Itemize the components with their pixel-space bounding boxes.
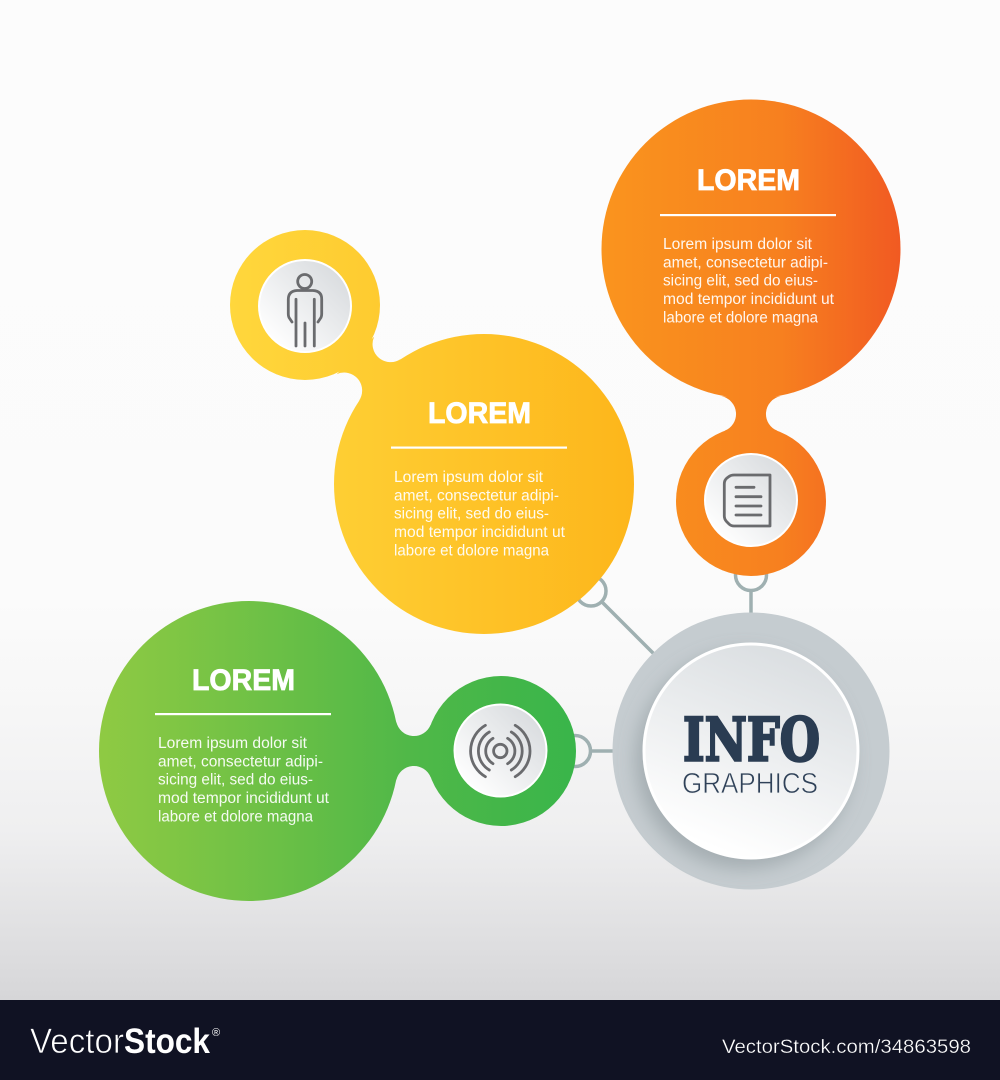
footer registered mark: ® <box>212 1027 220 1039</box>
orange text block: amet, consectetur adipi- <box>663 254 828 271</box>
yellow shape <box>230 230 634 634</box>
icon: signal waves <box>454 704 546 796</box>
orange text block: sicing elit, sed do eius- <box>663 273 818 290</box>
connector: orange to hub <box>736 560 766 614</box>
panel: orange node <box>602 100 900 576</box>
hub title: INFO: INFO <box>683 706 820 776</box>
green text block: Lorem ipsum dolor sit <box>158 735 308 752</box>
orange text block <box>663 236 835 326</box>
green text block: sicing elit, sed do eius- <box>158 772 313 789</box>
green heading: LOREM <box>192 664 295 697</box>
icon: person <box>259 260 351 352</box>
green text block: labore et dolore magna <box>158 808 313 825</box>
footer bar <box>0 1000 1000 1080</box>
panel: central hub <box>612 612 890 890</box>
orange text block: Lorem ipsum dolor sit <box>663 236 813 253</box>
connector: yellow to hub <box>576 576 654 654</box>
yellow text block <box>394 469 566 559</box>
green text block: amet, consectetur adipi- <box>158 753 323 770</box>
hub outer ring <box>612 612 890 890</box>
orange heading: LOREM <box>697 164 800 197</box>
yellow text block: mod tempor incididunt ut <box>394 524 566 541</box>
icon: document <box>705 454 797 546</box>
hub inner disc <box>644 644 858 858</box>
orange shape <box>602 100 900 576</box>
yellow text block: amet, consectetur adipi- <box>394 487 559 504</box>
green text block: mod tempor incididunt ut <box>158 790 330 807</box>
hub subtitle: GRAPHICS: GRAPHICS <box>682 768 818 800</box>
orange text block: mod tempor incididunt ut <box>663 291 835 308</box>
panel: yellow node <box>230 230 634 634</box>
footer logo: VectorStock <box>30 1022 210 1061</box>
yellow text block: Lorem ipsum dolor sit <box>394 469 544 486</box>
green text block <box>158 735 330 825</box>
connector: green to hub <box>560 736 614 766</box>
orange text block: labore et dolore magna <box>663 309 818 326</box>
footer url: VectorStock.com/34863598 <box>722 1037 971 1058</box>
yellow text block: sicing elit, sed do eius- <box>394 506 549 523</box>
panel: green node <box>99 601 576 901</box>
green shape <box>99 601 576 901</box>
yellow heading: LOREM <box>428 397 531 430</box>
yellow text block: labore et dolore magna <box>394 542 549 559</box>
